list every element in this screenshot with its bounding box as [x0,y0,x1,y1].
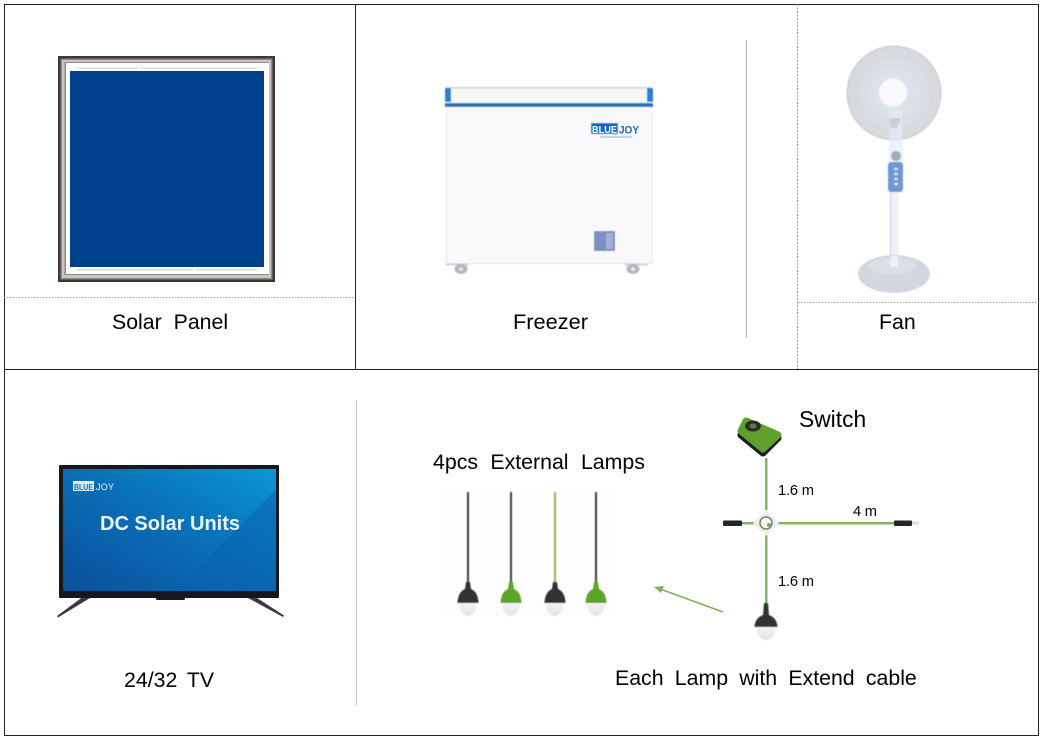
label: 1.6 m lower: 1.6 m [778,574,814,590]
label: 4 m: 4 m [853,504,877,520]
label: 1.6 m upper: 1.6 m [778,483,814,499]
icon: television [57,465,284,618]
label: 4pcs External Lamps: 4pcs External Lamps [433,450,645,474]
cable harness with hub and connectors [723,458,919,603]
icon: fan [847,46,941,293]
icon: switch [741,420,778,453]
label: Switch: Switch [799,406,866,432]
icon: television: BLUE [74,482,93,492]
label: Solar Panel: Solar Panel [112,310,228,334]
label: 24/32 TV: 24/32 TV [124,668,215,692]
icon: four hanging lamps [445,492,610,616]
label: Freezer: Freezer [513,310,588,334]
icon: lamp on extension cable [754,603,778,640]
freezer logo: BLUE [592,124,617,136]
label: Each Lamp with Extend cable: Each Lamp with Extend cable [615,666,917,690]
freezer logo [592,124,640,136]
label: Fan: Fan [879,310,916,334]
icon: freezer [445,87,653,274]
freezer logo: JOY [619,124,640,136]
icon: solar panel [58,56,275,282]
arrow [654,586,723,612]
icon: television: JOY [96,482,114,492]
icon: television: DC Solar Units [100,512,240,535]
